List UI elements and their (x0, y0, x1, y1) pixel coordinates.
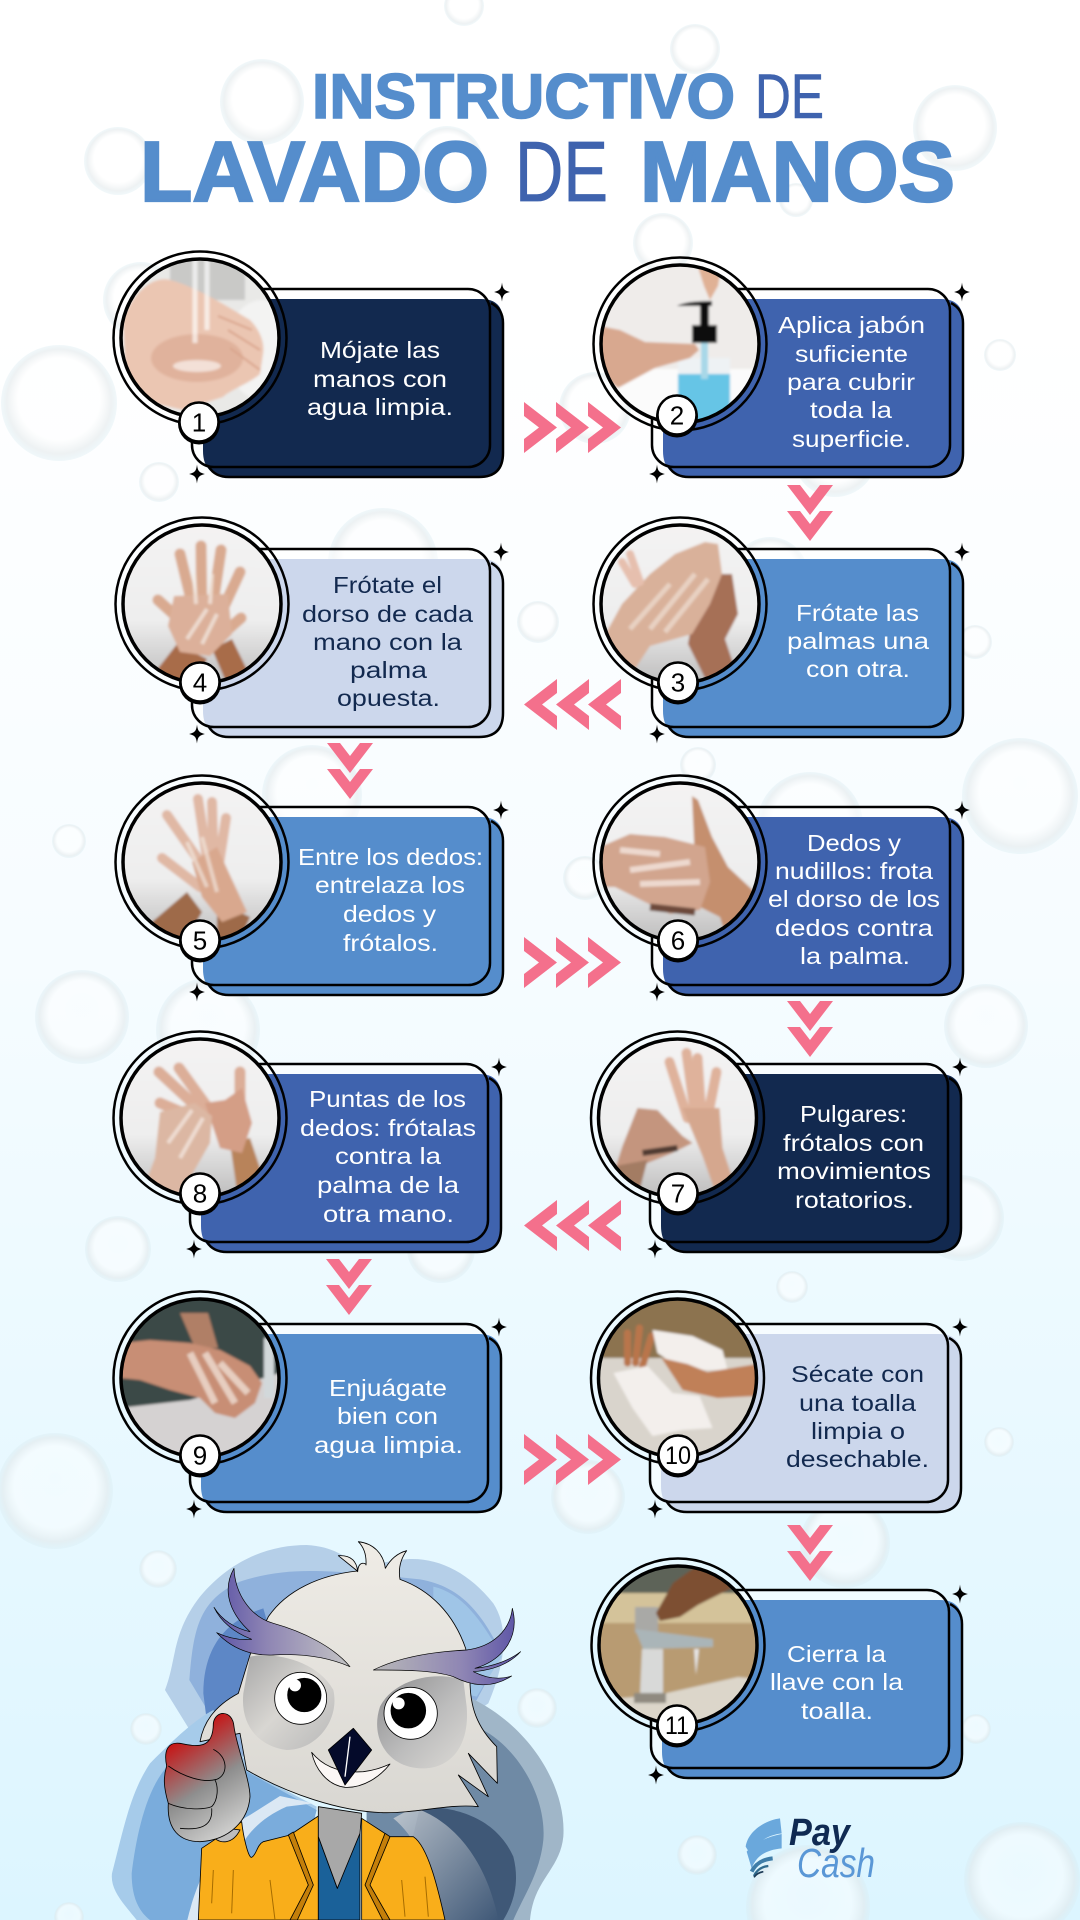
card 1 text: agua limpia. (307, 394, 453, 420)
title line 1: DE (755, 62, 824, 132)
card 3 text: Frótate las (796, 600, 919, 626)
number 7 badge: 7 (671, 1178, 685, 1208)
number 6 badge (657, 920, 699, 962)
card 11 text: Cierra la (787, 1641, 887, 1667)
card 4 text: dorso de cada (302, 601, 474, 627)
card 8 shape (186, 1058, 507, 1258)
number 8 badge (179, 1174, 221, 1216)
card 10 text: limpia o (811, 1418, 905, 1444)
mascot head (200, 1542, 497, 1813)
card 1 text: Mójate las (320, 337, 440, 363)
card 10 text: desechable. (786, 1446, 929, 1472)
card 8 text: palma de la (317, 1172, 460, 1198)
card 10 text: Sécate con (791, 1361, 924, 1387)
arrow: step 2 to 3 (787, 485, 833, 541)
card 8 text: otra mano. (323, 1201, 454, 1227)
logo wordmark: Pay (789, 1812, 852, 1854)
logo: PayCash (746, 1812, 875, 1886)
arrow: step 5 to 6 (524, 937, 621, 988)
photo: rubbing thumbs (591, 1032, 764, 1204)
card 11 text (770, 1641, 904, 1724)
photo: rubbing palms (594, 518, 766, 690)
card 8 text (300, 1086, 476, 1227)
step 1 panel (114, 252, 510, 484)
number 5 badge: 5 (193, 926, 207, 956)
card 3 text: con otra. (806, 656, 910, 682)
step 6 panel (594, 776, 970, 1002)
card 9 text: Enjuágate (329, 1375, 447, 1401)
arrow: step 9 to 10 (524, 1434, 621, 1485)
title line 1: INSTRUCTIVO (312, 62, 735, 132)
card 2 text: suficiente (795, 341, 908, 367)
number 6 badge: 6 (671, 926, 685, 956)
number 2 badge: 2 (670, 400, 684, 430)
card 6 text: Dedos y (807, 830, 901, 856)
photo: wet hands under tap (114, 252, 298, 424)
number 9 badge (179, 1436, 221, 1478)
card 2 text: para cubrir (787, 369, 915, 395)
arrow: step 3 to 4 (524, 679, 621, 730)
card 7 text: frótalos con (783, 1130, 924, 1156)
mascot jacket (198, 1807, 445, 1920)
arrow: step 7 to 8 (524, 1200, 621, 1251)
number 1 badge (178, 402, 220, 444)
logo: PayCash: Cash (797, 1840, 875, 1886)
photo: soap dispenser (594, 258, 766, 430)
arrow: step 8 to 9 (326, 1259, 372, 1315)
card 3 text: palmas una (787, 628, 930, 654)
step 9 panel (114, 1292, 507, 1518)
number 11 badge (656, 1706, 698, 1748)
card 6 text: nudillos: frota (775, 858, 934, 884)
step 8 panel (114, 1032, 507, 1258)
title line 2: LAVADO (140, 125, 489, 220)
card 4 text: mano con la (313, 629, 463, 655)
card 8 text: contra la (335, 1143, 442, 1169)
card 6 text: dedos contra (775, 915, 934, 941)
logo waves icon (746, 1818, 782, 1877)
card 2 text (778, 312, 925, 452)
card 5 shape (189, 800, 509, 1002)
card 10 shape (647, 1318, 968, 1518)
number 11 badge: 11 (665, 1712, 689, 1740)
arrow: step 6 to 7 (787, 1001, 833, 1057)
step 7 panel (591, 1032, 968, 1258)
card 10 text: una toalla (799, 1390, 917, 1416)
card 3 shape (649, 542, 970, 744)
step 10 panel (591, 1292, 968, 1518)
number 7 badge (657, 1174, 699, 1216)
title line 2 (140, 125, 955, 220)
card 9 text (314, 1375, 463, 1458)
step 11 panel (592, 1558, 968, 1784)
step 2 panel (594, 258, 970, 484)
number 3 badge (657, 662, 699, 704)
card 3 text (787, 600, 930, 682)
number 10 badge: 10 (665, 1442, 691, 1470)
number 5 badge (179, 920, 221, 962)
photo: closing the faucet (592, 1558, 764, 1732)
mascot: owl with thumb up (112, 1542, 564, 1920)
mascot background blobs (112, 1545, 564, 1920)
number 3 badge: 3 (671, 668, 685, 698)
photo: rinsing under tap (114, 1292, 286, 1464)
mascot eyebrows (214, 1568, 521, 1685)
card 2 shape (649, 282, 970, 484)
step 4 panel (116, 518, 509, 744)
card 7 text: movimientos (777, 1158, 931, 1184)
number 9 badge: 9 (193, 1440, 207, 1470)
card 11 text: toalla. (801, 1698, 873, 1724)
card 5 text (298, 844, 483, 956)
card 7 text: rotatorios. (795, 1187, 914, 1213)
number 10 badge (657, 1436, 699, 1478)
card 4 text: Frótate el (333, 572, 442, 598)
card 2 text: Aplica jabón (778, 312, 925, 338)
arrow: step 10 to 11 (787, 1525, 833, 1581)
card 10 text (786, 1361, 929, 1472)
number 8 badge: 8 (193, 1178, 207, 1208)
title line 2: MANOS (640, 125, 955, 220)
card 2 text: superficie. (792, 426, 911, 452)
number 4 badge (179, 662, 221, 704)
card 9 text: bien con (337, 1403, 438, 1429)
card 1 text: manos con (313, 366, 447, 392)
card 7 text (777, 1101, 931, 1213)
card 11 text: llave con la (770, 1669, 904, 1695)
number 4 badge: 4 (193, 668, 207, 698)
card 1 text (307, 337, 453, 420)
number 2 badge (656, 396, 698, 438)
card 6 text (768, 830, 940, 969)
card 8 text: dedos: frótalas (300, 1115, 476, 1141)
photo: interlaced fingers (116, 776, 288, 948)
title (140, 62, 955, 220)
title line 2: DE (515, 125, 608, 220)
arrow: step 4 to 5 (327, 743, 373, 799)
card 9 shape (186, 1318, 507, 1518)
card 2 text: toda la (810, 397, 893, 423)
card 5 text: Entre los dedos: (298, 844, 483, 870)
card 4 text: opuesta. (337, 685, 440, 711)
card 4 text (302, 572, 474, 711)
card 8 text: Puntas de los (309, 1086, 466, 1112)
card 9 text: agua limpia. (314, 1432, 463, 1458)
step 3 panel (594, 518, 970, 744)
number 1 badge: 1 (192, 408, 206, 438)
card 4 shape (189, 542, 509, 744)
mascot thumb-up hand (164, 1713, 250, 1842)
card 6 text: la palma. (800, 943, 910, 969)
card 5 text: entrelaza los (315, 872, 465, 898)
photo: back of hands (116, 518, 288, 690)
step 5 panel (116, 776, 509, 1002)
photo: fingertips on palm (114, 1032, 286, 1204)
card 4 text: palma (350, 657, 428, 683)
card 11 shape (648, 1584, 968, 1784)
card 7 shape (647, 1058, 968, 1258)
card 7 text: Pulgares: (800, 1101, 907, 1127)
card 5 text: dedos y (343, 901, 436, 927)
arrow: step 1 to 2 (524, 402, 621, 453)
photo: drying with towel (591, 1292, 764, 1464)
card 5 text: frótalos. (343, 930, 438, 956)
card 6 text: el dorso de los (768, 886, 940, 912)
photo: knuckles on palm (594, 776, 766, 948)
card 6 shape (649, 800, 970, 1002)
card 1 shape (189, 282, 510, 484)
